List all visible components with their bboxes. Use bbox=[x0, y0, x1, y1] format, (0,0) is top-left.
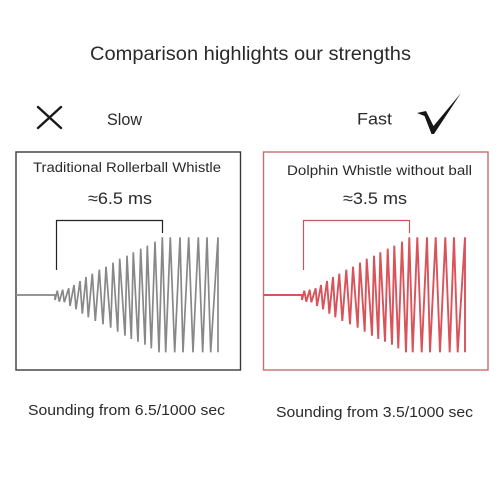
time value: 3.5 ms: ≈3.5 ms bbox=[343, 189, 407, 208]
waveform: grey bbox=[16, 237, 218, 352]
bracket: onset time bbox=[56, 220, 162, 270]
label: fast: Fast bbox=[357, 110, 392, 128]
time value: 6.5 ms: ≈6.5 ms bbox=[88, 189, 152, 208]
caption: traditional: Sounding from 6.5/1000 sec bbox=[28, 403, 225, 419]
label: slow: Slow bbox=[107, 111, 142, 129]
icon: check mark bbox=[417, 93, 461, 134]
waveform: red bbox=[264, 237, 465, 352]
panel: dolphin whistle bbox=[264, 152, 488, 370]
panel heading: dolphin: Dolphin Whistle without ball bbox=[287, 163, 472, 178]
panel: traditional whistle bbox=[16, 152, 240, 370]
bracket: onset time bbox=[304, 220, 410, 270]
caption: dolphin: Sounding from 3.5/1000 sec bbox=[276, 405, 473, 421]
panel heading: traditional: Traditional Rollerball Whistle bbox=[33, 160, 221, 175]
title: Comparison highlights our strengths bbox=[90, 44, 411, 65]
icon: cross bbox=[38, 107, 61, 128]
